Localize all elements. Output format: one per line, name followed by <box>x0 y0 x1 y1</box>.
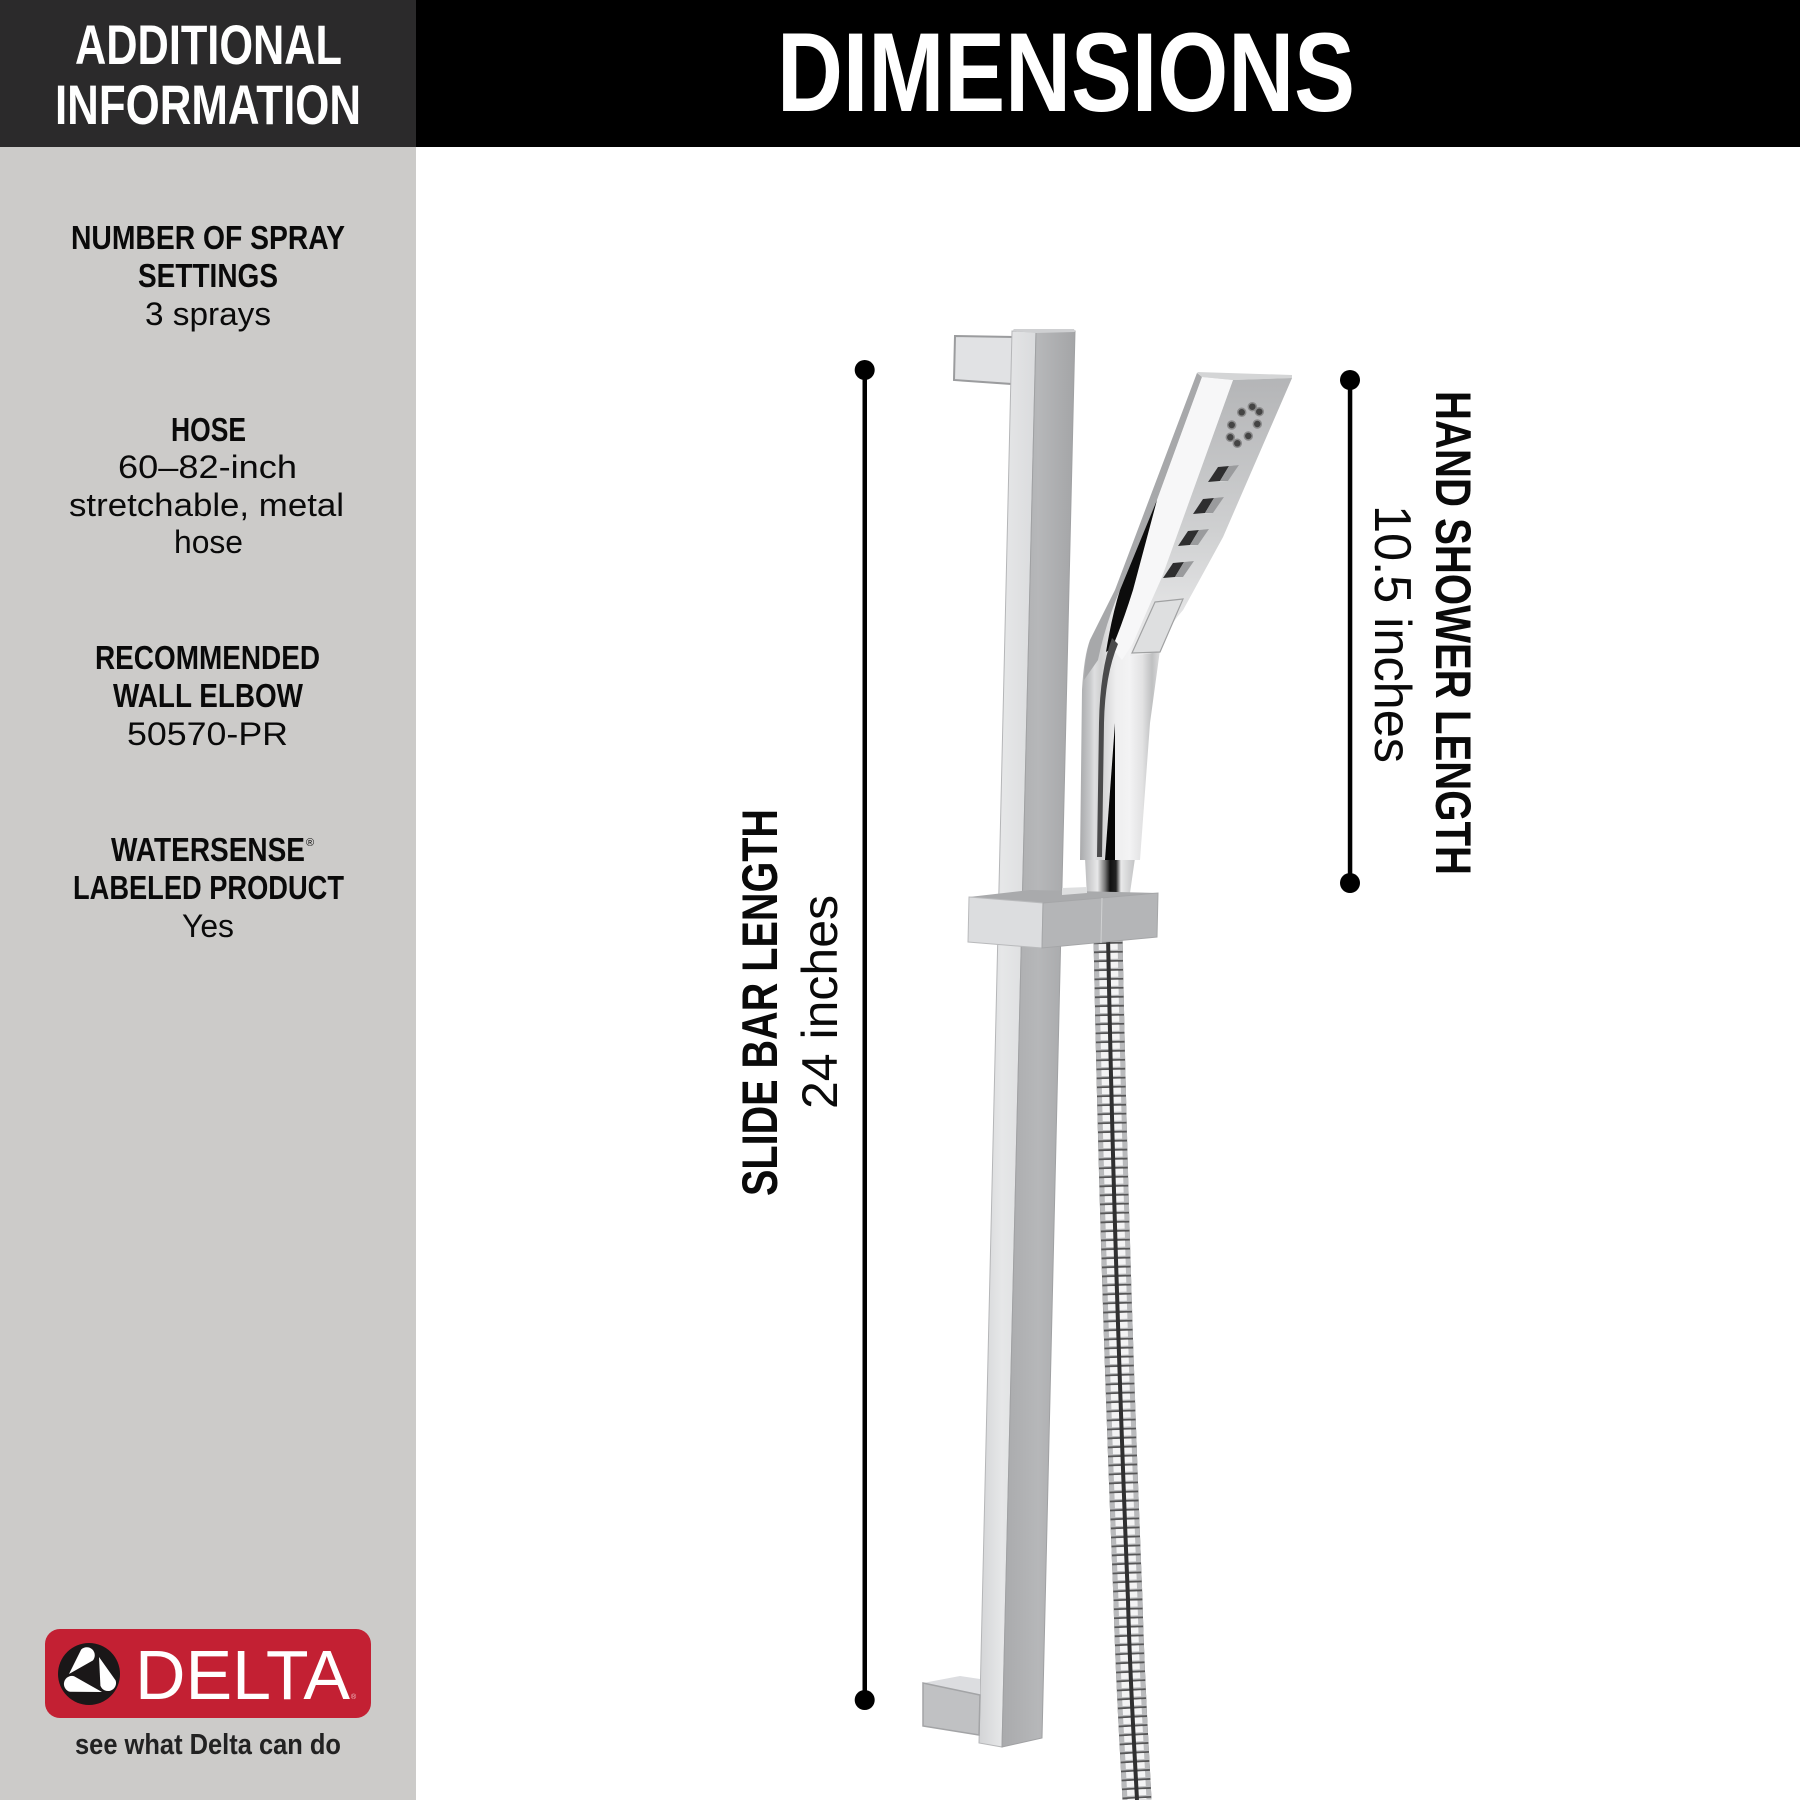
text block: number of spray settings: SETTINGS <box>138 257 278 294</box>
product: slide bar <box>979 329 1075 1747</box>
top edge <box>1197 372 1292 380</box>
label: hand shower length: 10.5 inches <box>1363 505 1421 763</box>
text block: recommended wall elbow: RECOMMENDED <box>95 639 320 676</box>
black reflection <box>1106 500 1157 652</box>
product: slide bar holder block <box>968 887 1158 948</box>
text block: hose: 60–82-inch <box>118 449 297 485</box>
product: hand shower <box>1080 372 1292 897</box>
text block: number of spray settings <box>71 219 345 332</box>
text block: hose: hose <box>174 524 243 560</box>
heading line 2: INFORMATION <box>55 73 361 136</box>
tagline: see what Delta can do <box>75 1729 341 1761</box>
product: flexible hose <box>1108 935 1137 1800</box>
spray button <box>1132 599 1183 653</box>
logo: delta <box>45 1629 371 1718</box>
title: dimensions: DIMENSIONS <box>777 10 1355 135</box>
dimension line: hand shower length <box>1340 370 1360 893</box>
text block: hose: HOSE <box>171 411 246 448</box>
handle dark band <box>1097 638 1118 857</box>
black wedge <box>1105 723 1115 860</box>
shower collar <box>1085 858 1135 897</box>
label: slide bar length: 24 inches <box>792 895 848 1109</box>
text block: number of spray settings: NUMBER OF SPRAY <box>71 219 345 256</box>
shower handle <box>1080 373 1292 860</box>
header band: dimensions <box>416 0 1800 147</box>
label: slide bar length: SLIDE BAR LENGTH <box>732 809 788 1196</box>
product: top wall bracket <box>954 336 1014 384</box>
icon: delta emblem <box>58 1643 120 1705</box>
text block: watersense labeled product <box>73 831 344 944</box>
label: slide bar length <box>732 809 848 1196</box>
panel: additional information sidebar <box>0 147 416 1800</box>
product: bottom wall bracket <box>923 1676 980 1735</box>
logo: delta: ® <box>351 1693 357 1701</box>
wordmark: DELTA <box>135 1636 350 1714</box>
text block: hose: stretchable, metal <box>69 487 344 523</box>
spray face <box>1130 378 1292 656</box>
text block: watersense labeled product: WATERSENSE <box>111 831 305 868</box>
nozzles <box>1163 465 1239 578</box>
white front strip <box>1112 377 1233 660</box>
label: hand shower length <box>1363 391 1481 875</box>
text block: watersense labeled product: Yes <box>182 908 234 944</box>
header block: additional information <box>0 0 416 147</box>
label: hand shower length: HAND SHOWER LENGTH <box>1425 391 1481 875</box>
left side strip <box>1084 373 1202 680</box>
text block: recommended wall elbow <box>95 639 320 752</box>
text block: watersense labeled product: LABELED PRODUCT <box>73 869 344 906</box>
text block: number of spray settings: 3 sprays <box>145 296 271 332</box>
text block: recommended wall elbow: WALL ELBOW <box>113 677 304 714</box>
spray holes <box>1226 403 1263 447</box>
text block: recommended wall elbow: 50570-PR <box>127 716 288 752</box>
text block: hose <box>69 411 344 560</box>
text block: watersense labeled product: ® <box>306 837 314 849</box>
heading line 1: ADDITIONAL <box>75 13 342 76</box>
dimension line: slide bar length <box>855 360 875 1710</box>
